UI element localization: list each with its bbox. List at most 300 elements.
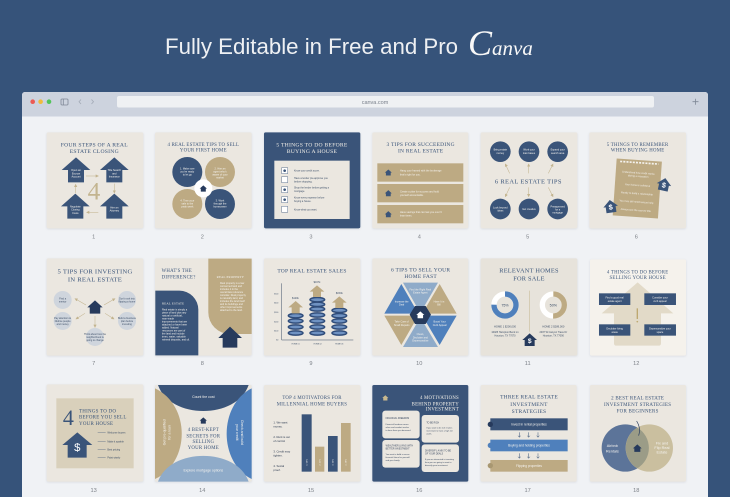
circle texts: market [216, 176, 224, 179]
exclamation icon [636, 308, 638, 322]
circle texts: search area [551, 152, 565, 155]
panel labels: Check and build [240, 420, 244, 445]
blue panel: real estate: improvements that are [162, 321, 188, 324]
list: of control [273, 439, 285, 443]
heading: MILLENNIAL HOME BUYERS [277, 402, 347, 407]
bar text: Have savings that can last you over 6 [400, 211, 442, 214]
segment texts: Take Care of [395, 321, 409, 324]
value labels [292, 281, 343, 300]
tan panel: real property: concerned land and [220, 285, 243, 288]
center house badge [194, 179, 212, 197]
list: 1. We want [273, 421, 288, 425]
number label: 15 [308, 488, 314, 494]
list: Paint wisely [107, 456, 121, 459]
heading: IN REAL ESTATE [398, 149, 444, 155]
blue panel: real estate: REAL ESTATE [162, 301, 184, 305]
title [165, 23, 533, 63]
circle texts [54, 297, 137, 342]
checklist text: Know every expense before [294, 197, 325, 200]
list: 4. Social [273, 464, 285, 468]
paper text: Ready to build a relationship [621, 191, 653, 196]
home details: 2037 W Canyon Trace Dr [539, 331, 567, 334]
blue panel: real estate: resources are part of [162, 330, 185, 333]
checklist text: Know your credit score. [294, 169, 320, 172]
blue panel: real estate: piece of land plus any [162, 312, 187, 315]
panel texts: worth. [426, 432, 432, 435]
axes: HOME 02 [314, 344, 322, 346]
template 13: things to do [47, 384, 143, 494]
tan panel: real property: REAL PROPERTY [217, 275, 245, 279]
big number: 4 [88, 177, 101, 205]
list: proof. [273, 468, 281, 472]
template 15: motivators bars [264, 385, 360, 494]
number label: 4 [418, 234, 421, 240]
title: Fully Editable in Free and Pro [165, 34, 458, 59]
heading: TOP 4 MOTIVATORS FOR [282, 396, 342, 401]
circle texts: mentor [59, 300, 67, 303]
bar labels: 4. 48% [346, 459, 348, 466]
circle texts: going to change [86, 339, 104, 342]
tan panel: real property: other improvements [220, 306, 243, 309]
template 16: motivations panels [372, 385, 468, 494]
heading: 5 THINGS TO DO BEFORE [276, 142, 348, 148]
template 2: four tips circles [155, 132, 252, 240]
heading: THREE REAL ESTATE [500, 395, 558, 401]
panel labels: Explore mortgage options [183, 468, 223, 472]
venn labels: Fix and [656, 441, 668, 445]
heading: TOP REAL ESTATE SALES [277, 269, 347, 275]
paper text: Understand how credit works [622, 171, 655, 176]
panel texts: OF YOUR DEALS [425, 453, 444, 456]
circles [490, 141, 568, 219]
heading [79, 409, 127, 427]
segment texts: Depersonalize [412, 340, 429, 343]
circle texts: neighborhood is [86, 336, 104, 339]
house labels: Escrow [72, 172, 80, 175]
panel texts: WEALTHIER LIVING WITH [386, 445, 413, 448]
segment texts: Bill [437, 304, 441, 307]
heading: 2 BEST REAL ESTATE [611, 396, 664, 401]
list: 3. Credit may [273, 450, 291, 454]
heading: STRATEGIES [512, 409, 546, 415]
inner panel [56, 398, 134, 468]
home details: Houston, TX 77090 [543, 334, 565, 337]
blue panel: real estate: added. Natural [162, 327, 179, 330]
list [98, 432, 126, 459]
template 5: six tips [481, 132, 577, 240]
home details: HOME 1 $200,000 [494, 324, 517, 328]
checkboxes [282, 168, 288, 212]
template 8: the difference [155, 258, 252, 367]
heading [604, 396, 671, 415]
house icons [385, 169, 392, 217]
coin stacks [288, 297, 347, 335]
browser window [22, 92, 708, 497]
circle texts: Bring estate [494, 149, 508, 152]
segment texts: Small Repairs [394, 324, 410, 327]
circle texts: Pay attention to [54, 317, 72, 320]
blue panel: real estate: the land and include [162, 333, 185, 336]
segment texts: Deal [399, 304, 405, 307]
checklist text: buying a house. [294, 200, 312, 203]
circle texts: Build a business [118, 317, 137, 320]
heading [276, 142, 348, 155]
circle texts: mortgage [552, 212, 564, 215]
paper text [619, 171, 656, 213]
bar end knobs [488, 422, 493, 468]
heading: FOUR STEPS OF A REAL [61, 142, 128, 148]
circle texts: Don't rush into [119, 297, 135, 300]
heading [499, 268, 559, 283]
panel texts [386, 417, 454, 467]
bar text: that's right for you. [400, 173, 421, 176]
circle texts: 3. Work [216, 200, 225, 203]
check marks [283, 169, 286, 201]
number label: 14 [199, 488, 205, 494]
tan arrows [288, 285, 347, 313]
down arrows [518, 432, 539, 458]
panel texts: diversify your investment. [425, 464, 449, 467]
blue panel: real estate: natural or artificial, [162, 315, 183, 318]
list: Make it sparkle [107, 440, 124, 443]
paper text: during a recession [628, 174, 649, 179]
heading: 4 THINGS TO DO BEFORE [607, 270, 668, 275]
heading: 3 TIPS FOR SUCCEEDING [386, 142, 455, 148]
circle texts [493, 149, 565, 215]
text panels [382, 411, 459, 472]
panel texts: BETTER INVESTMENT [386, 449, 410, 451]
segment texts: Estate Agent [413, 292, 428, 295]
heading [412, 396, 459, 412]
heading: FOR BEGINNERS [617, 410, 659, 415]
axes: $300 [274, 312, 278, 314]
house labels: Account [71, 176, 81, 179]
heading [186, 428, 221, 451]
panel labels: Get pre-qualified [162, 419, 166, 445]
heading: IN REAL ESTATE [68, 277, 122, 284]
box texts: estate agent [608, 300, 622, 303]
number label: 13 [91, 488, 97, 494]
heading: 6 TIPS TO SELL YOUR [391, 267, 450, 273]
house icon [382, 395, 388, 401]
hexagon segments [384, 283, 457, 347]
heading: INVESTMENT STRATEGIES [604, 403, 671, 408]
circle texts: sale to the [182, 203, 194, 206]
value labels: $167k [314, 281, 321, 284]
template 12: before selling [590, 259, 686, 367]
bar labels: Flipping properties [516, 464, 542, 468]
bar text: Hang your framed with the brokerage [400, 170, 442, 173]
circle texts: Expand your [551, 149, 565, 152]
circle texts: aware of your [212, 174, 228, 177]
box texts: Declutter living [606, 328, 624, 331]
template 6: note paper [589, 132, 686, 240]
circle texts: and money [57, 323, 70, 326]
toolbar icons [61, 99, 698, 105]
panel texts: real estate to have a high net [426, 429, 453, 432]
big number: 4 [63, 405, 74, 430]
list: Best pricing [107, 448, 121, 451]
heading [57, 268, 132, 284]
bar text: lean times. [400, 215, 412, 218]
heading: WHEN BUYING HOME [611, 149, 664, 154]
tan panel: real property: and its buildings and [220, 303, 244, 306]
template 7: investing tips [47, 258, 143, 367]
big house [602, 282, 673, 346]
circle texts: Preapproved [550, 205, 565, 208]
panel texts: to have them you deserved. [386, 429, 411, 432]
circle texts: flipping a home [119, 300, 136, 303]
center house [633, 444, 642, 452]
paper text: You may still need rescue help [619, 199, 654, 205]
center house [87, 300, 103, 314]
heading: YOUR FIRST HOME [180, 149, 227, 154]
box texts: Depersonalize your [649, 328, 671, 331]
paper [613, 158, 662, 219]
heading: 5 TIPS FOR INVESTING [57, 268, 132, 275]
bars [302, 414, 351, 472]
circle texts: peak week [181, 206, 194, 209]
dollar houses [602, 177, 673, 214]
circle texts: Think about how the [84, 333, 107, 336]
home details: HOME 2 $289,000 [542, 324, 565, 328]
home details: Houston, TX 77070 [494, 334, 516, 337]
axes: $400 [274, 303, 278, 305]
heading [386, 142, 455, 155]
heading: INVESTMENT [510, 402, 548, 408]
panel texts: Financial freedom comes [386, 423, 409, 426]
list [273, 421, 291, 472]
segment texts [394, 288, 447, 343]
dollar house: $ [74, 442, 81, 454]
house labels: Hire an [110, 206, 119, 209]
circle texts: plan before [121, 320, 134, 323]
heading: SELLING [192, 440, 214, 445]
traffic lights [30, 99, 51, 104]
dollar houses: $ [661, 180, 667, 190]
heading [500, 395, 558, 415]
axes: HOME 01 [292, 344, 300, 346]
circle texts: 1. Make sure [180, 168, 195, 171]
circle texts: for a [555, 209, 561, 212]
house labels: Attorney [110, 210, 120, 213]
paper text: Your home is collateral [625, 183, 651, 188]
value labels: $120k [292, 297, 299, 300]
list: money. [273, 425, 283, 429]
circle texts: money [497, 152, 505, 155]
panel labels [162, 395, 244, 472]
panel texts: financial future for yourself [386, 456, 410, 459]
heading: RELEVANT HOMES [499, 268, 559, 275]
heading [162, 269, 196, 281]
panel texts: DIVERSIFY, A MIX TO BE [425, 450, 451, 453]
panel labels: Count the cost [192, 395, 215, 399]
blue panel: real estate: man-made [162, 318, 175, 321]
home details [491, 324, 567, 337]
circle texts: 4. Time your [180, 200, 194, 203]
arrows [75, 299, 115, 327]
browser title bar [22, 92, 708, 116]
tan panel: real property [208, 259, 252, 334]
template 11: relevant homes [481, 258, 577, 367]
axes [274, 283, 353, 346]
checklist text: Know what you want. [294, 208, 317, 211]
circle texts: you're ready [180, 171, 195, 174]
tan panel: real property: includes it in the [220, 288, 239, 291]
circle texts: 2. Hire an [215, 168, 226, 171]
box texts: Consider your [652, 297, 668, 300]
axes: HOME 03 [335, 344, 343, 346]
venn labels: Rentals [606, 449, 619, 453]
template 9: sales chart [264, 258, 360, 367]
panel texts: and your family. [386, 459, 401, 462]
paper text: Always see the escrow title [621, 208, 652, 213]
house labels: Closing [71, 209, 80, 212]
venn labels: Airbnb [607, 444, 618, 448]
heading: BEFORE YOU SELL [79, 416, 127, 421]
template 1: four steps [47, 132, 143, 240]
bar labels: 3. 36% [333, 459, 335, 466]
bar text: yourself accountable. [400, 194, 424, 197]
heading: SELLING YOUR HOUSE [609, 276, 666, 281]
pale circles [54, 291, 136, 346]
box texts: space [657, 331, 664, 334]
circle texts: through the [214, 203, 227, 206]
heading: 6 REAL ESTATE TIPS [495, 178, 562, 185]
panel texts: You want to build a secure [386, 453, 410, 456]
bar labels [508, 422, 550, 468]
number label: 9 [309, 361, 313, 367]
bar text: Create a plan for success and hold [400, 190, 439, 193]
heading: ESTATE CLOSING [70, 149, 119, 155]
value labels: $150k [336, 292, 343, 295]
panel labels: for a loan [167, 425, 171, 440]
segment texts: Declutter and [413, 336, 428, 339]
heading: WHAT'S THE [162, 269, 192, 274]
tan bars [377, 163, 463, 223]
heading: YOUR HOME [188, 446, 219, 451]
bar labels: Invest in rental properties [511, 422, 547, 426]
bar labels [306, 459, 348, 466]
checklist text: Have a lender pre-approve you [294, 177, 328, 180]
houses [61, 157, 129, 219]
checklist text: Shop the lender before getting a [294, 187, 330, 190]
house labels: Title Search [108, 169, 122, 172]
tan panel: real property: attached to the land. [220, 309, 243, 312]
box texts [606, 297, 671, 334]
dollar houses: $ [608, 202, 613, 212]
house labels [70, 169, 122, 215]
circle texts: Work your [523, 149, 535, 152]
circle texts [180, 168, 228, 209]
circle texts: to let go [183, 174, 192, 177]
blue panel: real estate [155, 291, 198, 355]
circle texts: Find a [59, 297, 67, 300]
house icon [200, 417, 207, 424]
number label: 6 [635, 234, 638, 240]
list: 2. Rent is out [273, 435, 290, 439]
title: Canva [468, 23, 533, 63]
donut 50 percent: 50% [550, 303, 558, 307]
blue panel: real estate: trees, water, valuable [162, 336, 186, 339]
heading: SECRETS FOR [186, 434, 221, 439]
tan panel: real property: Real property is a law [220, 282, 244, 285]
heading [607, 270, 668, 281]
panel labels: your credit [235, 424, 239, 440]
list: tighten. [273, 454, 283, 458]
circle texts: ideas [497, 210, 504, 213]
heading [607, 143, 669, 154]
segment texts: Have It in [434, 300, 445, 303]
segment texts: Curb Appeal [433, 324, 447, 327]
house labels: and [112, 172, 117, 175]
heading: YOUR HOUSE [79, 422, 113, 427]
circle texts: Get creative [522, 208, 536, 211]
address bar [117, 96, 654, 108]
house labels: Open an [71, 169, 81, 172]
heading: 4 REAL ESTATE TIPS TO SELL [168, 143, 239, 148]
arrows [76, 176, 114, 212]
heading: INVESTMENT [426, 407, 459, 412]
heading [61, 142, 128, 155]
circles [172, 157, 235, 219]
number label: 5 [526, 234, 529, 240]
bar labels: 2. 24% [319, 459, 321, 466]
circle texts: Look beyond [493, 206, 508, 209]
venn labels [606, 441, 670, 455]
segment texts: Find the Right Real [410, 288, 432, 291]
heading: 4 MOTIVATIONS [420, 396, 459, 401]
heading: THINGS TO DO [79, 409, 116, 414]
bars [490, 418, 568, 472]
curved arrow [637, 421, 640, 436]
panel texts: If you want to be rich it takes [426, 426, 452, 429]
house [218, 327, 242, 348]
number label: 18 [633, 488, 639, 494]
heading [391, 267, 450, 280]
panel texts: If you are interested in investing [425, 458, 454, 461]
panel texts: FINANCIAL FREEDOM [386, 417, 409, 420]
house labels: Negotiate [70, 205, 81, 208]
bar labels: Buying and holding properties [508, 444, 550, 448]
blue boxes [599, 293, 676, 336]
tan panel: real property: is naturally land, and [220, 297, 244, 300]
center hexagon [410, 306, 431, 324]
number label: 7 [92, 361, 95, 367]
number label: 8 [201, 361, 204, 367]
four curved panels [155, 385, 252, 482]
axes: $500 [274, 293, 278, 295]
panel texts: TO BE RICH [426, 422, 440, 424]
number label: 16 [416, 488, 422, 494]
checklist text: before shopping. [294, 180, 313, 183]
house labels: Insurance [109, 176, 120, 179]
heading: HOME FAST [404, 274, 437, 280]
home details: 10025 Hampton Bend Ln [491, 331, 519, 334]
address bar: canva.com [362, 100, 389, 106]
circle texts: investing [122, 323, 132, 326]
axes: $0 [276, 340, 278, 342]
box texts: curb appeal [653, 300, 667, 303]
bar labels: 1. 60% [306, 459, 308, 466]
blue panel: real estate: attached or have been [162, 324, 188, 327]
template 18: venn diagram [590, 385, 686, 494]
circle texts: loan bases [523, 152, 536, 155]
axes: $200 [274, 321, 278, 323]
heading [277, 396, 347, 407]
heading: DIFFERENCE? [162, 276, 196, 281]
template 17: three strategies [481, 385, 577, 494]
